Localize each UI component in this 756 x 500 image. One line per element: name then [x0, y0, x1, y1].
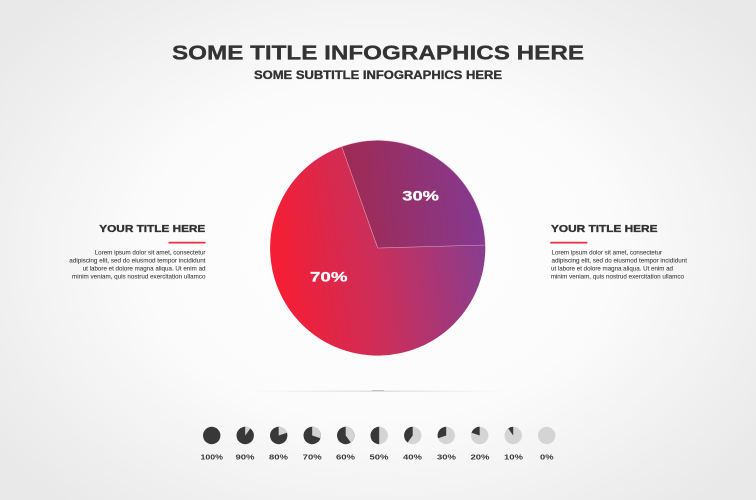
title: SOME TITLE INFOGRAPHICS HERE — [172, 41, 584, 64]
main pie chart — [270, 140, 485, 356]
90% icon — [236, 427, 254, 444]
30% label: 30% — [402, 189, 439, 204]
scale labels: 40% — [403, 452, 423, 462]
left red accent line — [168, 242, 206, 244]
right body text: adipiscing elit, sed do eiusmod tempor incididunt — [552, 257, 687, 264]
scale labels: 20% — [470, 452, 490, 462]
pie shadow — [250, 390, 506, 392]
0% icon — [538, 427, 555, 444]
left body text: Lorem ipsum dolor sit amet, consectetur — [95, 249, 206, 256]
right text block — [550, 224, 687, 280]
right body text: minim veniam, quis nostrud exercitation ullamco — [551, 274, 684, 280]
right block heading: YOUR TITLE HERE — [551, 224, 658, 235]
40% icon — [404, 427, 421, 444]
scale labels: 70% — [303, 452, 322, 462]
right body text: ut labore et dolore magna aliqua. Ut enim ad — [551, 266, 673, 272]
70% label: 70% — [310, 270, 348, 285]
left body text: ut labore et dolore magna aliqua. Ut enim ad — [83, 266, 206, 272]
right red accent line — [550, 242, 587, 244]
scale labels: 80% — [269, 452, 289, 462]
right body text — [551, 249, 687, 280]
80% icon — [270, 427, 287, 444]
right body text: Lorem ipsum dolor sit amet, consectetur — [552, 249, 662, 256]
scale labels: 0% — [540, 452, 554, 462]
percentage scale — [200, 427, 555, 462]
scale labels: 60% — [336, 452, 356, 462]
10% icon — [504, 427, 522, 444]
scale labels: 50% — [370, 452, 389, 462]
70% slice — [270, 140, 485, 356]
scale labels: 90% — [236, 452, 255, 462]
left text block — [69, 224, 206, 280]
scale labels: 30% — [437, 452, 457, 462]
left body text: minim veniam, quis nostrud exercitation ullamco — [72, 274, 206, 280]
30% slice — [342, 140, 485, 248]
20% icon — [471, 427, 488, 444]
70% icon — [304, 427, 321, 444]
subtitle: SOME SUBTITLE INFOGRAPHICS HERE — [254, 68, 502, 82]
left body text — [69, 249, 206, 280]
100% icon — [203, 427, 220, 444]
scale labels: 100% — [200, 452, 224, 462]
50% icon — [370, 427, 388, 444]
left body text: adipiscing elit, sed do eiusmod tempor incididunt — [69, 257, 206, 264]
scale labels: 10% — [504, 452, 524, 462]
scale labels — [200, 452, 554, 462]
30% icon — [438, 427, 455, 444]
60% icon — [337, 427, 354, 444]
left block heading: YOUR TITLE HERE — [99, 224, 206, 235]
